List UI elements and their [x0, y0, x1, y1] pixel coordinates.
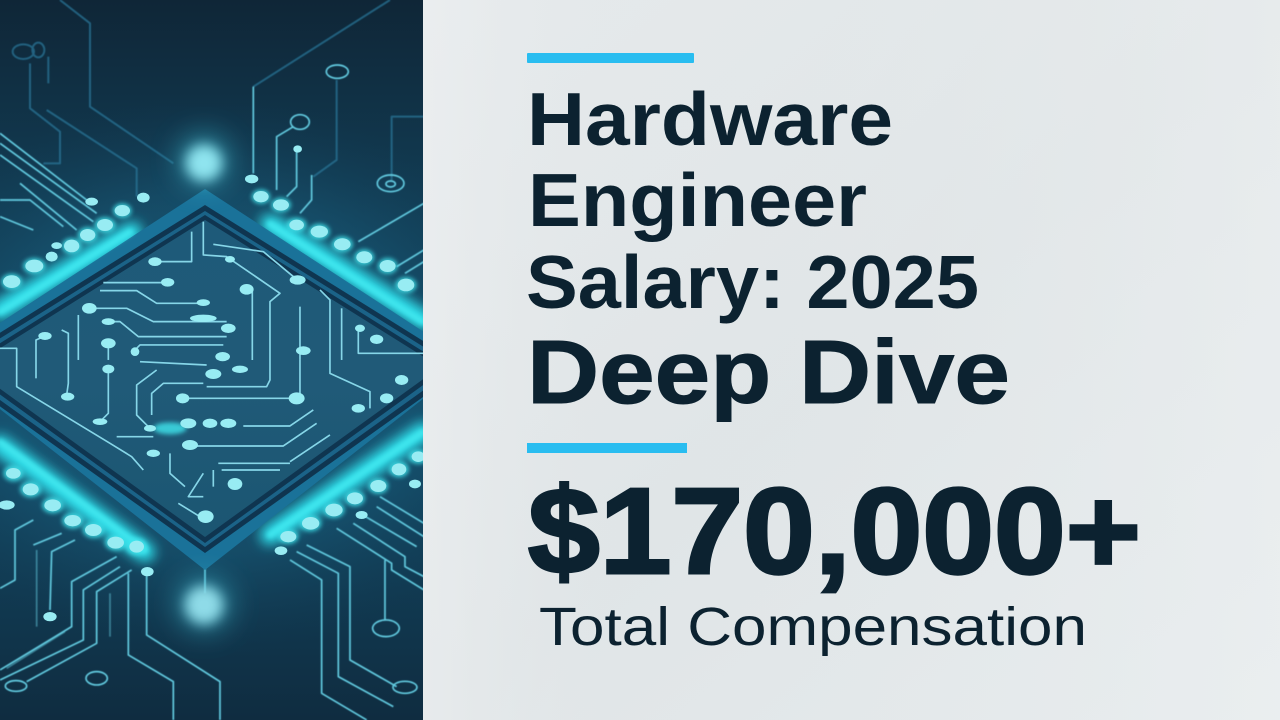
- right background panel: [423, 0, 1280, 720]
- accent bar: middle: [527, 443, 687, 453]
- upper circuit traces outside chip: [0, 0, 424, 273]
- connector dots: lower half: [0, 365, 428, 621]
- title: [526, 77, 1010, 423]
- title: Engineer: [528, 158, 867, 242]
- glowing node: bottom: [176, 576, 232, 632]
- title: Salary: 2025: [526, 240, 979, 324]
- accent bar: top: [527, 53, 694, 63]
- connector dots: upper half: [1, 145, 417, 361]
- chip body: [0, 189, 470, 570]
- chip bright edges: [0, 224, 423, 550]
- glowing node: top: [178, 134, 230, 186]
- salary figure: $170,000+: [528, 463, 1141, 599]
- lower circuit traces outside chip: [0, 497, 424, 720]
- panel: circuit board illustration: [0, 0, 423, 720]
- traces inside chip: upper half: [0, 222, 424, 360]
- traces inside chip: lower half: [17, 360, 370, 517]
- title: Deep Dive: [527, 323, 1010, 423]
- chip glow bands: [0, 224, 423, 552]
- salary caption: Total Compensation: [539, 597, 1087, 657]
- title: Hardware: [527, 77, 893, 161]
